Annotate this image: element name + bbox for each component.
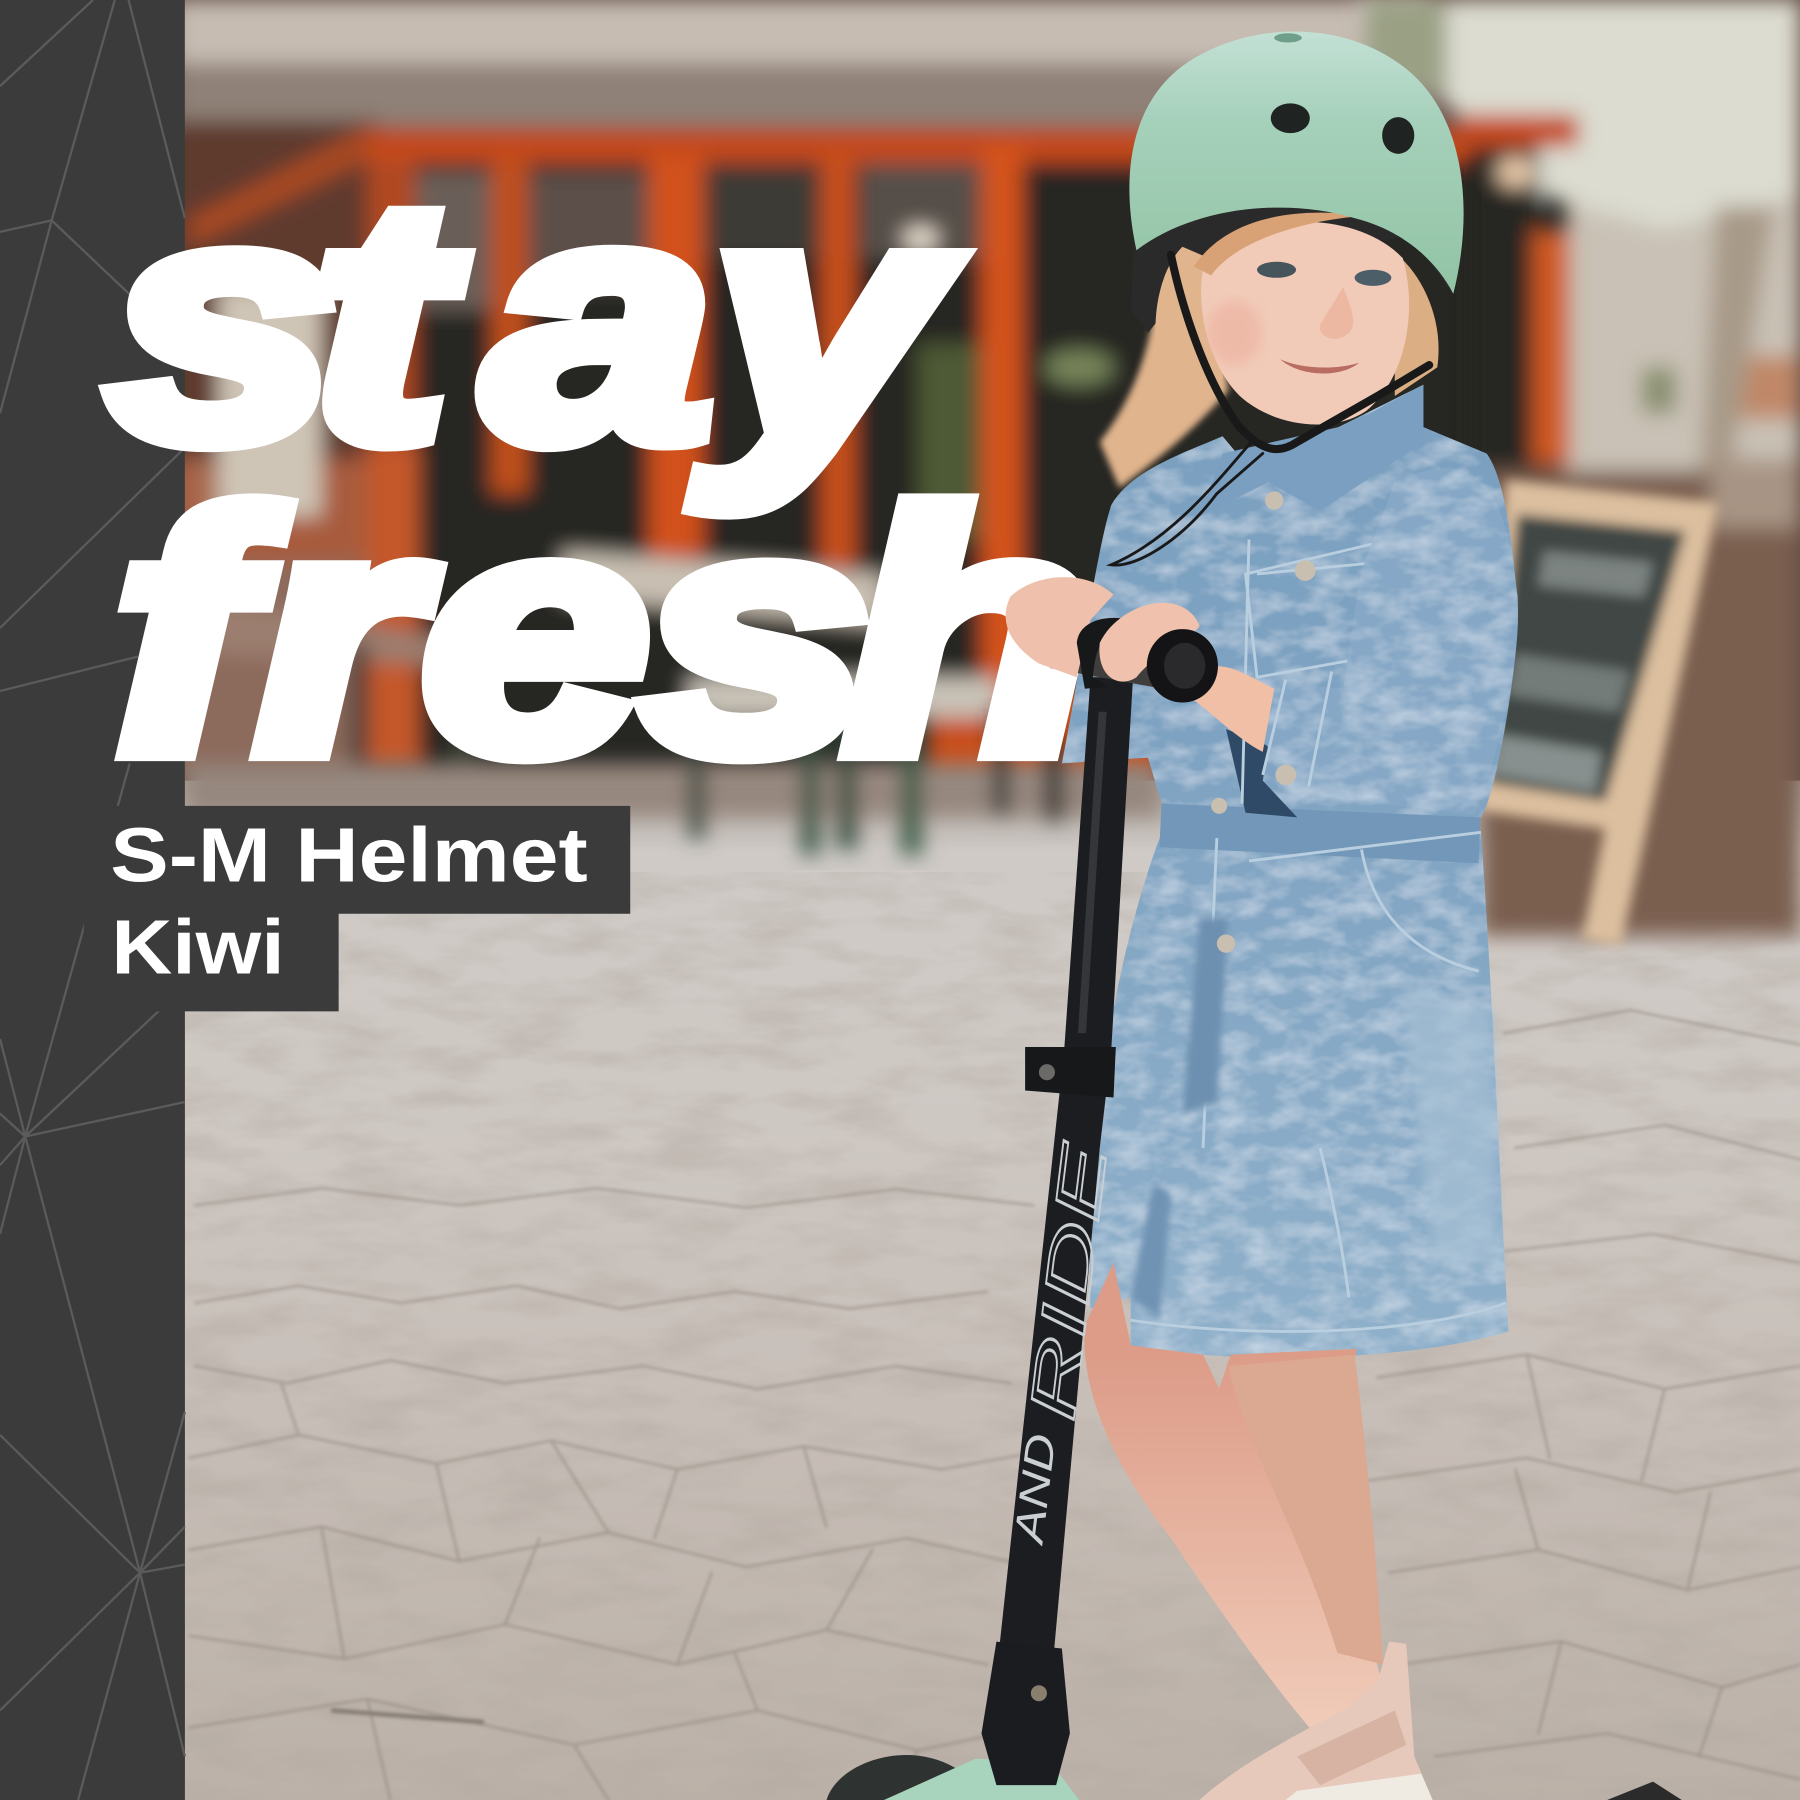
shoes	[1200, 1642, 1433, 1800]
jacket collar	[1200, 385, 1423, 517]
sleeve cuff seams	[1263, 672, 1332, 786]
label background	[84, 806, 630, 1011]
scooter stem	[999, 677, 1133, 1653]
product label	[84, 806, 630, 1011]
handlebar	[1050, 629, 1194, 695]
hair left side	[1155, 247, 1223, 389]
near hand	[1099, 603, 1200, 682]
right side wall, tree and fence	[1355, 0, 1800, 936]
helmet shell	[1129, 32, 1464, 294]
hands and handlebar in front of headline	[1006, 577, 1274, 752]
stem collar and fork	[982, 1642, 1070, 1785]
mouth	[1280, 359, 1359, 374]
label line 2: Kiwi	[111, 904, 285, 990]
dress darker shading	[1131, 1182, 1171, 1320]
stem highlight	[1078, 712, 1107, 1033]
cobblestone joints	[189, 1010, 1800, 1800]
stem top loop	[1077, 618, 1131, 689]
girl body and scooter behind the headline	[827, 298, 1682, 1800]
chalkboard sign	[1479, 480, 1718, 946]
hairline	[1194, 213, 1366, 276]
headline: stay fresh	[109, 130, 1094, 823]
stem clamp	[1025, 1047, 1116, 1097]
chin strap	[1111, 255, 1429, 565]
headline: stay fresh: stay	[109, 130, 962, 513]
far hand	[1006, 577, 1114, 677]
cobblestone paving texture	[185, 872, 1800, 1800]
helmet straps and padding	[1131, 195, 1451, 333]
stem lettering: AND	[1005, 1431, 1065, 1549]
jacket placket and seams	[1131, 540, 1506, 1331]
near-hand forearm	[1194, 666, 1274, 752]
helmet vents	[1271, 33, 1414, 154]
panel: dark side strip with geometric lines	[0, 0, 185, 1800]
stem lettering	[1000, 1138, 1121, 1551]
eyes	[1257, 262, 1296, 278]
grip end	[1147, 629, 1218, 703]
leg back	[1228, 1355, 1383, 1665]
hair ponytail	[1100, 298, 1228, 488]
legs	[1084, 1263, 1383, 1733]
stem lettering: RIDE	[1016, 1138, 1121, 1425]
dress waistband	[1159, 798, 1481, 863]
cheek blush	[1207, 301, 1262, 365]
face	[1201, 222, 1409, 425]
headline: stay fresh: fresh	[114, 442, 1094, 823]
denim dress skirt	[1090, 832, 1508, 1358]
nose	[1320, 287, 1353, 339]
girl head and helmet	[1111, 32, 1464, 565]
jacket buttons	[1211, 491, 1316, 953]
denim jacket torso	[1062, 385, 1518, 817]
scooter wheel and deck	[827, 1755, 967, 1800]
label line 1: S-M Helmet	[110, 813, 588, 899]
hair right side	[1395, 253, 1439, 396]
jacket shadow opening	[1226, 729, 1297, 817]
jacket sleeve	[1263, 468, 1518, 815]
